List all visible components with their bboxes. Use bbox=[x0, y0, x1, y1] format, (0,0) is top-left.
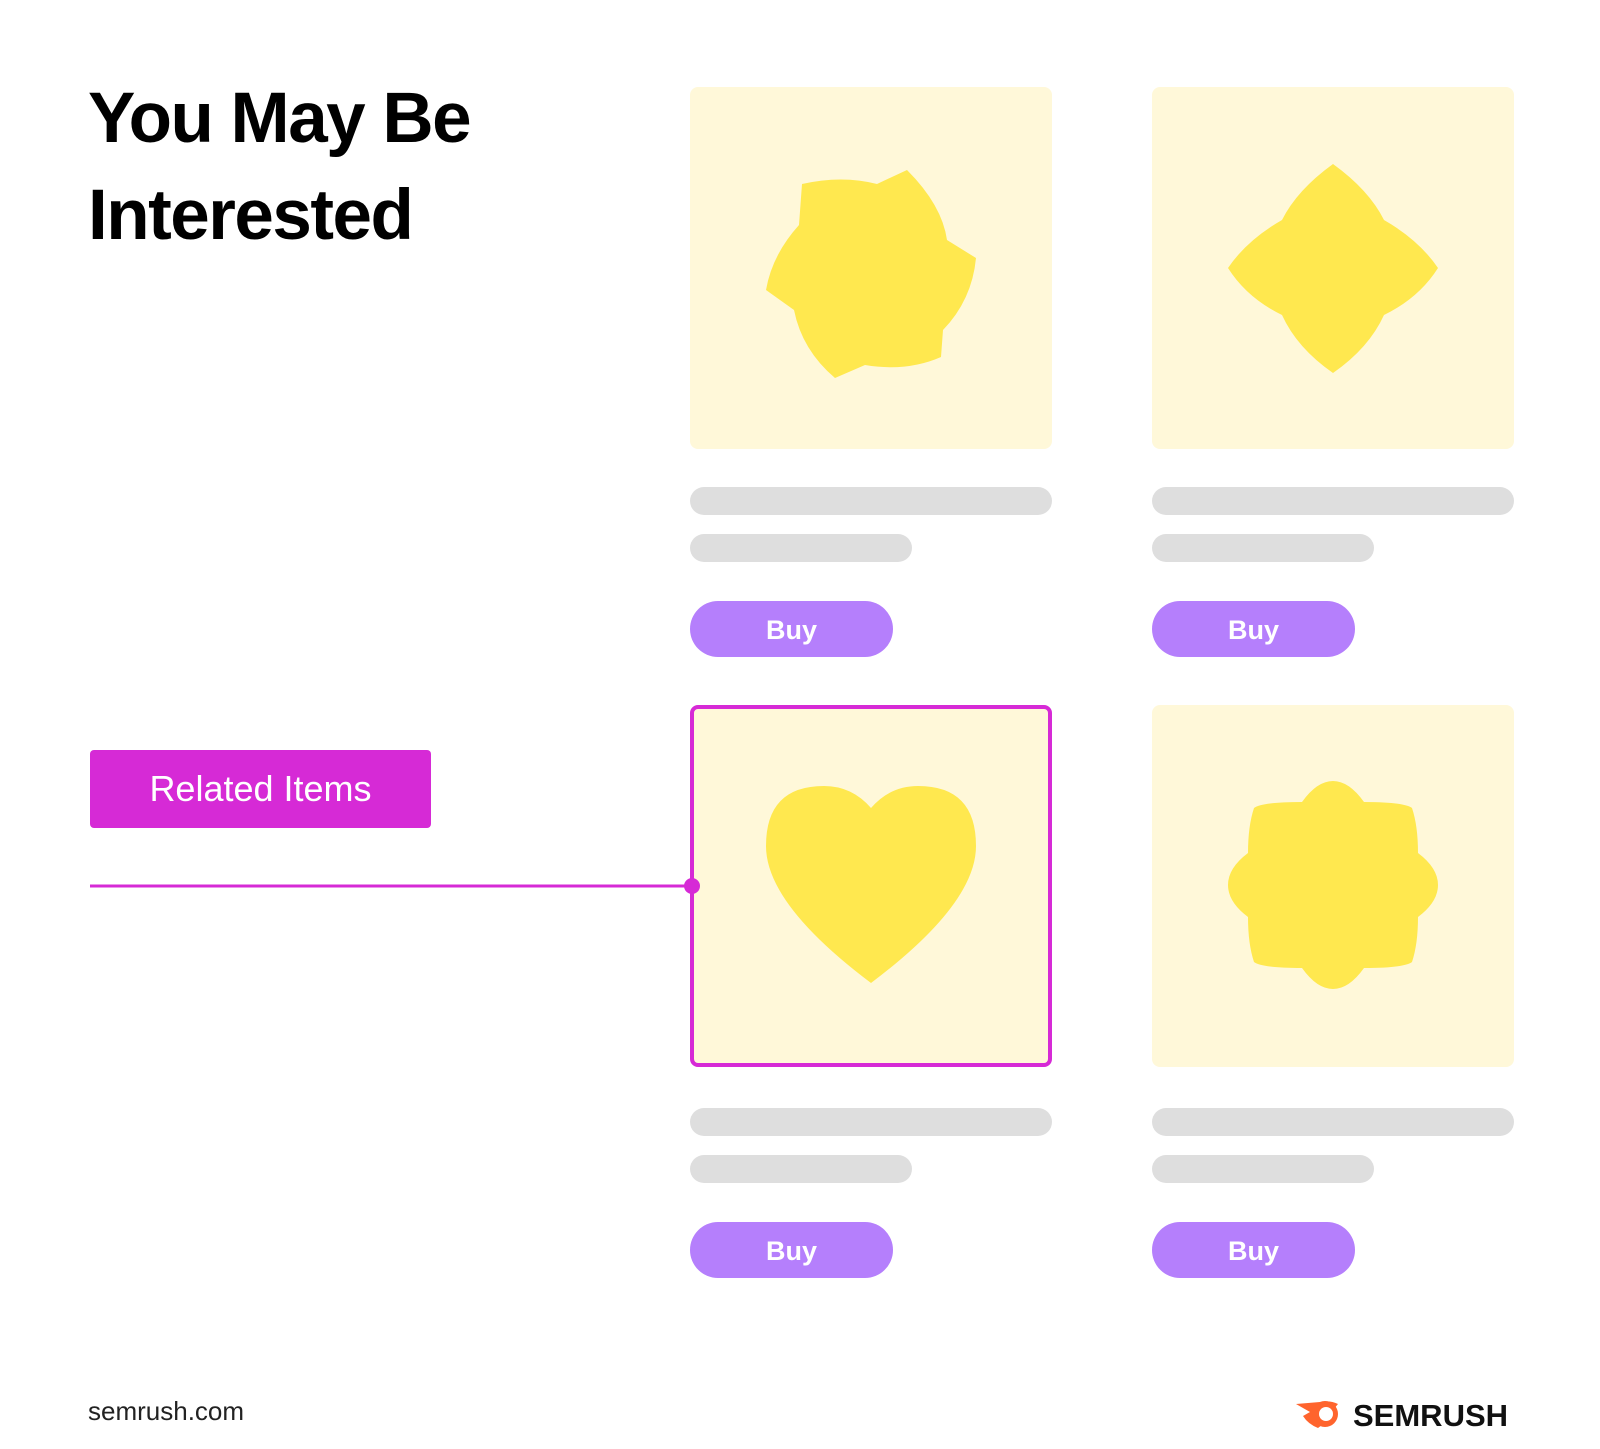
buy button 4 bbox=[1152, 1222, 1355, 1278]
title: You May Be bbox=[88, 79, 470, 158]
callout: related items label: Related Items bbox=[149, 768, 372, 809]
buy button 1 bbox=[690, 601, 893, 657]
title bbox=[88, 79, 470, 255]
title: Interested bbox=[88, 176, 412, 255]
callout: related items label bbox=[90, 750, 431, 828]
buy button 1: Buy bbox=[766, 615, 817, 645]
buy button 3: Buy bbox=[766, 1236, 817, 1266]
arrow: connector line bbox=[90, 878, 700, 894]
logo: semrush: SEMRUSH bbox=[1353, 1398, 1508, 1433]
buy button 4: Buy bbox=[1228, 1236, 1279, 1266]
buy button 2 bbox=[1152, 601, 1355, 657]
card 4: flower badge bbox=[1152, 705, 1514, 1278]
buy button 2: Buy bbox=[1228, 615, 1279, 645]
footer url: semrush.com bbox=[88, 1396, 244, 1426]
card 3: heart highlighted bbox=[690, 707, 1052, 1278]
card 2: four-point star bbox=[1152, 87, 1514, 657]
buy button 3 bbox=[690, 1222, 893, 1278]
card 1: star shape bbox=[690, 87, 1052, 657]
